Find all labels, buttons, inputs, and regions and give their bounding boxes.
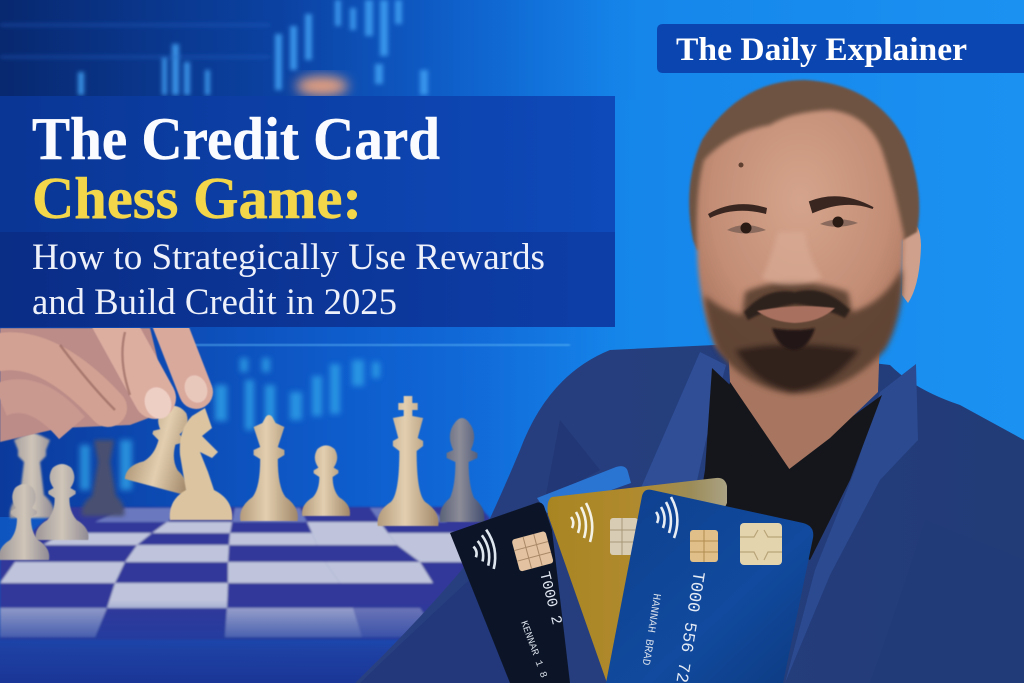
piece: dark rook back (82, 440, 124, 516)
heading: The Credit Card: The Credit Card (32, 106, 440, 172)
neck (728, 335, 880, 470)
badge: The Daily Explainer: The Daily Explainer (676, 32, 967, 68)
jacket (355, 345, 1024, 683)
soul patch (772, 328, 815, 350)
card: black (450, 502, 570, 683)
moustache (744, 290, 850, 320)
orange glow (296, 76, 348, 96)
card: gold (548, 478, 727, 683)
subtitle: How to Strategically Use Rewards (32, 237, 545, 278)
contactless icon (471, 529, 497, 571)
piece: pawn left (0, 484, 49, 560)
card: blue front (606, 490, 813, 683)
card: blue front: HANNAH BRAD (639, 592, 662, 666)
heading: Chess Game: Chess Game: (32, 165, 362, 231)
piece: king (377, 396, 439, 526)
shirt (700, 368, 882, 560)
nose (762, 232, 822, 288)
card: black: T000 2 (535, 570, 565, 627)
beard (704, 268, 902, 394)
piece: queen (240, 415, 298, 521)
subtitle: and Build Credit in 2025 (32, 282, 397, 323)
chess pieces (0, 320, 484, 560)
hand (0, 320, 211, 442)
piece: pawn center (302, 445, 350, 516)
card: black: KENNAR 1 8 (517, 620, 548, 680)
lips (757, 306, 835, 323)
eyes and brows (708, 162, 873, 234)
card: blue front: T000 556 72 (671, 570, 707, 683)
chip (511, 531, 554, 572)
man (355, 80, 1024, 683)
head (697, 110, 904, 392)
credit cards (450, 466, 813, 683)
ear (902, 223, 921, 303)
piece: rook back left (10, 432, 54, 518)
chip large (740, 523, 782, 565)
stock chart backdrop (0, 0, 428, 95)
piece: pawn second (35, 464, 89, 540)
piece: knight (170, 408, 232, 520)
card: blue rear (537, 466, 631, 513)
subtitle (32, 237, 545, 323)
piece: dark bishop (440, 418, 484, 522)
chessboard (0, 507, 620, 683)
chip (610, 518, 638, 555)
hair (689, 80, 919, 250)
chart glow behind chess pieces (80, 358, 380, 490)
badge: The Daily Explainer (657, 24, 1024, 73)
title panel (0, 96, 615, 327)
chip small (690, 530, 718, 562)
piece: held bishop (124, 398, 207, 495)
